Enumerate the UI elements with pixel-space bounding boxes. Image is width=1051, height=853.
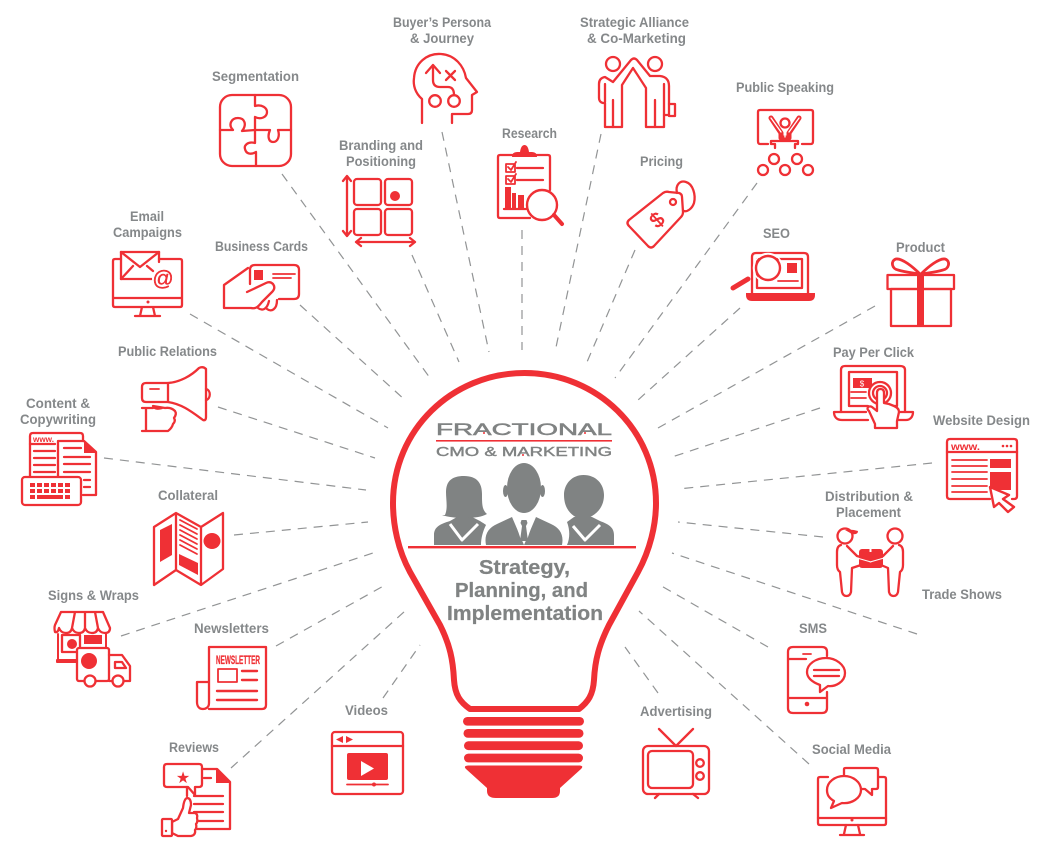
icon: price tag: $ xyxy=(645,208,670,233)
icon: head with strategy xyxy=(414,54,477,123)
icon: folded brochure xyxy=(154,513,223,585)
icon: television xyxy=(643,729,709,798)
icon: two people carrying package xyxy=(837,528,903,596)
topic: SMS: SMS xyxy=(799,621,827,636)
central light bulb xyxy=(393,373,656,798)
icon: monitor with chat bubbles xyxy=(818,768,886,835)
topic: Content & Copywriting: Content & xyxy=(26,396,90,411)
icon: pages and keyboard: www. xyxy=(32,434,54,444)
icon: newspaper: NEWSLETTER xyxy=(216,653,260,667)
logo: Fractional CMO & Marketing: CMO & MARKETING xyxy=(436,445,612,459)
topic: SEO xyxy=(733,226,815,301)
topic: SMS xyxy=(788,621,845,713)
topic: Public Speaking xyxy=(736,80,834,175)
topic: Website Design: Website Design xyxy=(933,413,1030,428)
bulb screw base xyxy=(463,717,584,798)
topic: Reviews xyxy=(162,740,230,836)
topic: Branding and Positioning xyxy=(339,138,423,246)
icon: two people high five xyxy=(599,57,675,127)
topic: Website Design xyxy=(933,413,1030,512)
topic: Public Speaking: Public Speaking xyxy=(736,80,834,95)
topic: Pricing: Pricing xyxy=(640,154,683,169)
icon: email on monitor: @ xyxy=(152,268,174,290)
icon: three business people xyxy=(434,463,614,545)
icon: gift box xyxy=(888,259,954,326)
topic: Segmentation xyxy=(212,69,299,166)
topic: Business Cards: Business Cards xyxy=(215,239,308,254)
topic: Email Campaigns: Email xyxy=(130,209,164,224)
bulb outline xyxy=(393,373,656,709)
topic: Social Media: Social Media xyxy=(812,742,891,757)
topic: Social Media xyxy=(812,742,891,835)
topic: SEO: SEO xyxy=(763,226,790,241)
topic: Collateral: Collateral xyxy=(158,488,218,503)
icon: browser window and cursor: www. xyxy=(950,441,980,453)
topic: Trade Shows: Trade Shows xyxy=(922,587,1002,602)
topic: Branding and Positioning: Branding and xyxy=(339,138,423,153)
topic: Business Cards xyxy=(215,239,308,310)
topic: Content & Copywriting: Copywriting xyxy=(20,412,96,427)
topic: Distribution & Placement: Distribution & xyxy=(825,489,913,504)
icon: megaphone in hand xyxy=(142,367,210,431)
topic: Advertising: Advertising xyxy=(640,704,712,719)
icon: laptop and magnifier xyxy=(733,253,815,301)
icon: speaker and audience xyxy=(758,110,813,175)
heading: strategy, planning, and implementation: Planning, and xyxy=(455,580,588,602)
topic: Distribution & Placement: Placement xyxy=(836,505,901,520)
topic: Signs & Wraps: Signs & Wraps xyxy=(48,588,139,603)
topic: Strategic Alliance & Co-Marketing: Strategic Alliance xyxy=(580,15,689,30)
topic: Pay Per Click xyxy=(833,345,914,428)
topic: Research: Research xyxy=(502,126,557,141)
topic: Product xyxy=(888,240,954,326)
topic: Research xyxy=(498,126,562,224)
heading: strategy, planning, and implementation xyxy=(447,557,603,625)
dashed connectors from bulb to topics xyxy=(104,132,932,768)
topic: Content & Copywriting xyxy=(20,396,96,505)
topic: Newsletters xyxy=(194,621,269,709)
icon: phone with chat bubble xyxy=(788,647,845,713)
icon: clipboard and magnifier xyxy=(498,145,562,224)
topic: Newsletters: Newsletters xyxy=(194,621,269,636)
topic: Buyer's Persona & Journey: & Journey xyxy=(410,31,474,46)
topic: Product: Product xyxy=(896,240,945,255)
icon: hand holding card xyxy=(224,265,299,310)
topic: Strategic Alliance & Co-Marketing xyxy=(580,15,689,127)
topic: Videos xyxy=(332,703,403,794)
topic: Public Relations: Public Relations xyxy=(118,344,217,359)
topic: Signs & Wraps xyxy=(48,588,139,686)
icon: positioning matrix xyxy=(343,176,415,246)
topic: Distribution & Placement xyxy=(825,489,913,596)
topic: Advertising xyxy=(640,704,712,798)
topic: Email Campaigns: Campaigns xyxy=(113,225,182,240)
heading: strategy, planning, and implementation: Strategy, xyxy=(479,557,570,579)
topic: Videos: Videos xyxy=(345,703,388,718)
topic: Public Relations xyxy=(118,344,217,431)
icon: laptop with clicking hand: $ xyxy=(860,380,865,388)
heading: strategy, planning, and implementation: Implementation xyxy=(447,603,603,625)
topic: Pricing xyxy=(628,154,695,248)
logo: Fractional CMO & Marketing: FRACTIONAL xyxy=(436,421,612,439)
topic: Collateral xyxy=(154,488,223,585)
topic: Reviews: Reviews xyxy=(169,740,219,755)
icon: video player window xyxy=(332,732,403,794)
logo: Fractional CMO & Marketing xyxy=(436,421,612,459)
icon: puzzle xyxy=(220,95,291,166)
icon: storefront and truck xyxy=(54,612,130,686)
topic: Segmentation: Segmentation xyxy=(212,69,299,84)
icon: review document and thumbs up: ★ xyxy=(176,768,190,787)
topic: Email Campaigns xyxy=(113,209,182,316)
topic: Buyer's Persona & Journey xyxy=(393,15,491,123)
topic: Buyer's Persona & Journey: Buyer’s Persona xyxy=(393,15,491,30)
topic: Branding and Positioning: Positioning xyxy=(346,154,416,169)
topic: Pay Per Click: Pay Per Click xyxy=(833,345,914,360)
topic: Strategic Alliance & Co-Marketing: & Co-Marketing xyxy=(587,31,686,46)
